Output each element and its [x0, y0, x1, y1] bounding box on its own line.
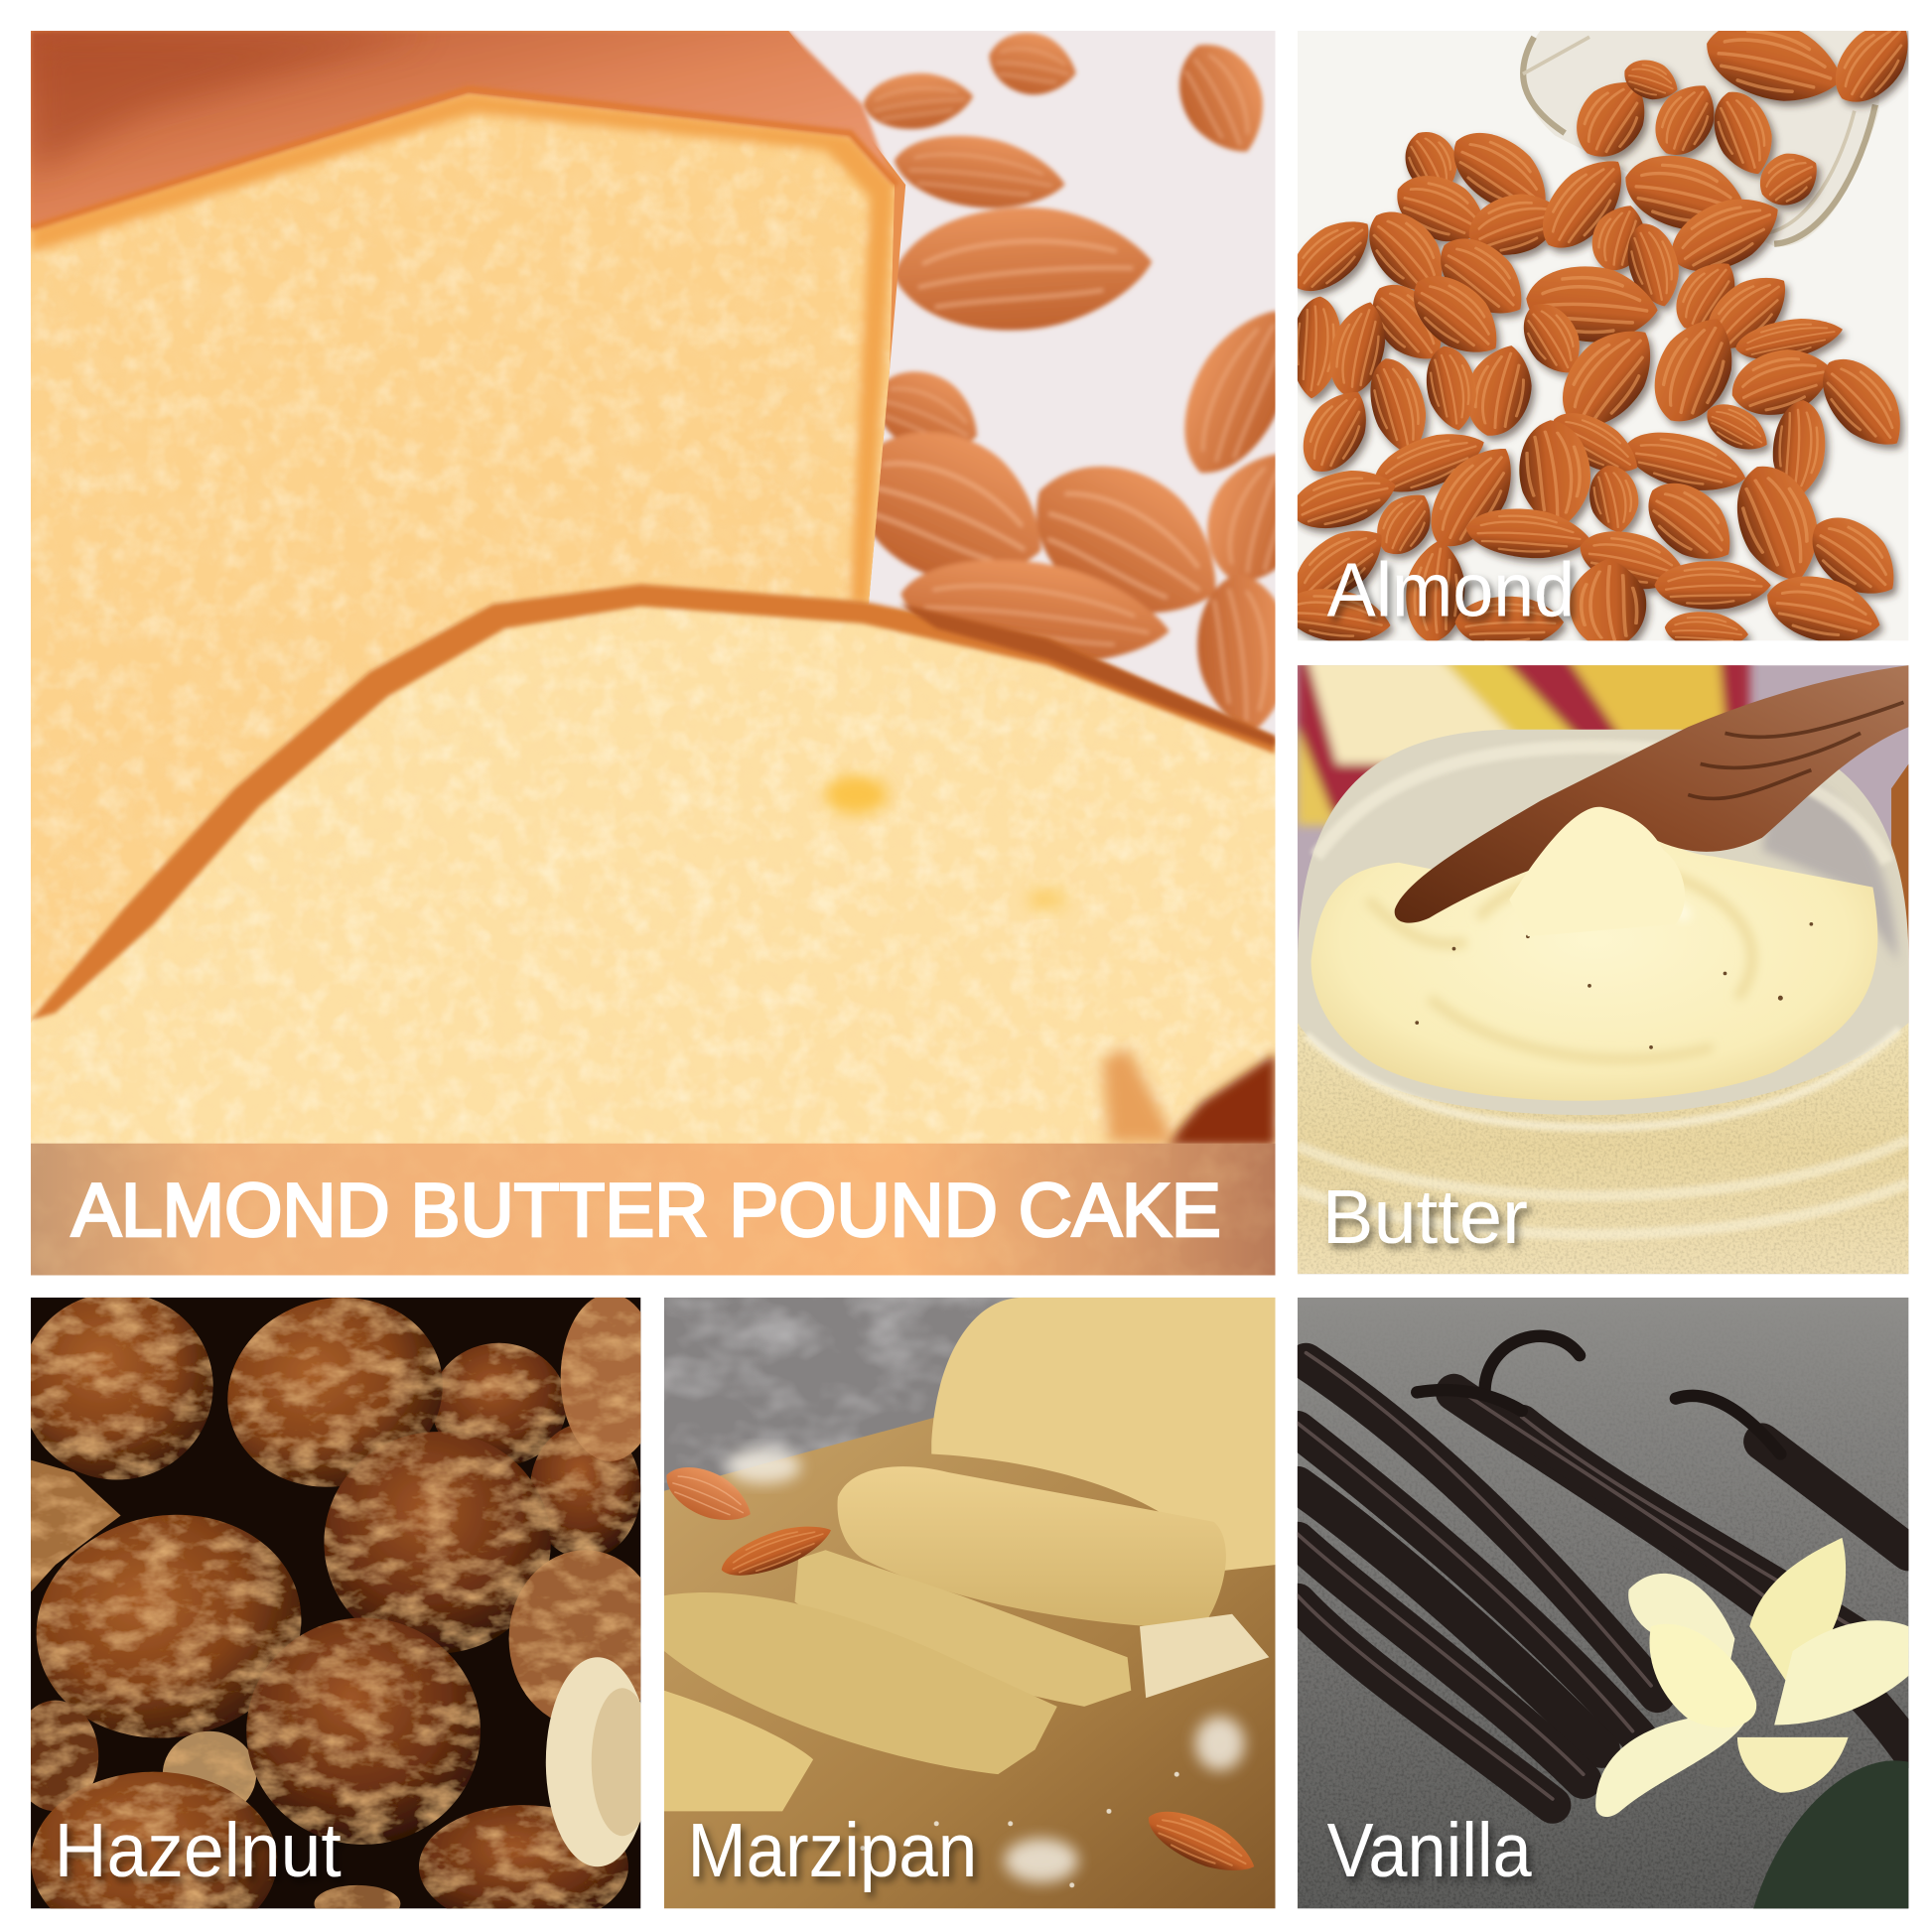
back cake slice [31, 31, 905, 1035]
panel: hazelnut [31, 1297, 641, 1908]
panel: butter [1297, 665, 1908, 1275]
sugar dust [727, 1449, 1244, 1887]
panel: almond [1297, 31, 1908, 641]
label: butter: Butter [1322, 1174, 1528, 1260]
title band [31, 1144, 1276, 1276]
backdrop stripes [1298, 653, 1908, 1274]
vanilla flower [1595, 1538, 1908, 1922]
panel: vanilla [1297, 1297, 1908, 1908]
almonds pile [1277, 6, 1926, 655]
label: hazelnut: Hazelnut [55, 1808, 342, 1893]
front cake slice [31, 581, 1275, 1144]
pale almonds behind the cake [827, 25, 1323, 737]
backdrop: pale surface [31, 31, 1276, 1276]
butter peak over spoon [1509, 807, 1685, 936]
halved hazelnut [546, 1657, 653, 1866]
marzipan slices [664, 1466, 1269, 1811]
glass jar [1298, 730, 1908, 1274]
panel: marzipan [664, 1297, 1275, 1908]
hazelnuts [12, 1274, 661, 1932]
backdrop [1298, 31, 1908, 640]
label: almond: Almond [1327, 548, 1575, 633]
vanilla pods [1298, 1336, 1908, 1805]
glass jar [1523, 31, 1879, 247]
wooden board [664, 1417, 1276, 1908]
stone backdrop [664, 1298, 1276, 1544]
label: vanilla: Vanilla [1327, 1808, 1532, 1893]
wooden spoon [1395, 665, 1908, 923]
title: ALMOND BUTTER POUND CAKE [71, 1169, 1221, 1253]
whipped butter [1311, 806, 1877, 1101]
marzipan log [931, 1298, 1276, 1571]
slate backdrop [1298, 1298, 1908, 1908]
dark backdrop [31, 1298, 640, 1908]
label: marzipan: Marzipan [688, 1808, 977, 1893]
panel: almond butter pound cake [31, 31, 1275, 1275]
almonds on board [657, 1455, 1263, 1885]
